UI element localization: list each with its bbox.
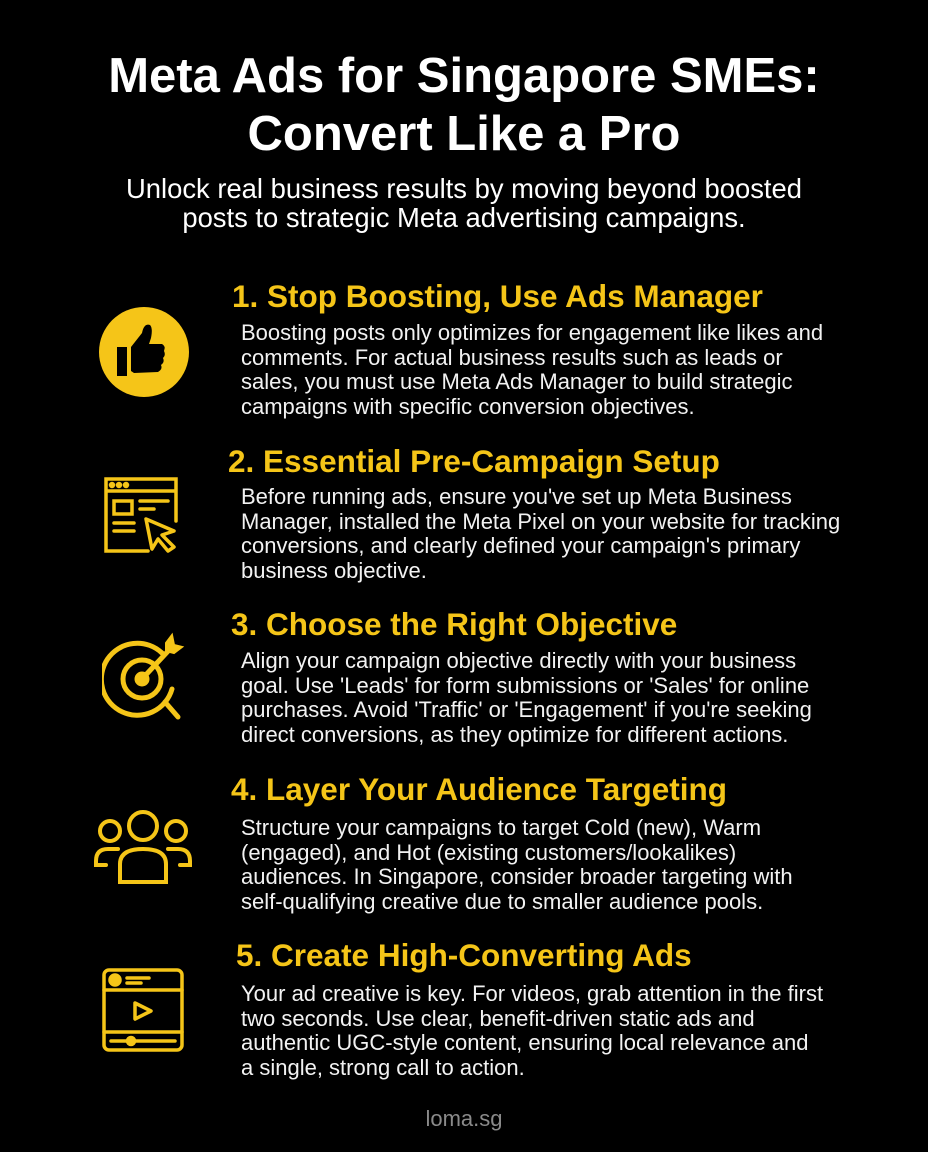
body 4: (engaged), and Hot (existing customers/lookalikes) (241, 840, 736, 864)
heading 1: 1. Stop Boosting, Use Ads Manager (232, 278, 763, 314)
body 1: sales, you must use Meta Ads Manager to build strategic (241, 369, 793, 394)
body 4: self-qualifying creative due to smaller audience pools. (241, 888, 763, 914)
body 2: Before running ads, ensure you've set up Meta Business (241, 484, 792, 509)
title: Convert Like a Pro (248, 107, 680, 161)
body 3: goal. Use 'Leads' for form submissions or 'Sales' for online (241, 672, 809, 698)
title: Meta Ads for Singapore SMEs: (108, 49, 820, 103)
body 4: Structure your campaigns to target Cold (new), Warm (241, 815, 761, 840)
body 2: business objective. (241, 558, 427, 582)
body 3: Align your campaign objective directly with your business (241, 648, 796, 673)
icon: thumbs up (99, 307, 189, 397)
subtitle (126, 173, 802, 233)
heading 3: 3. Choose the Right Objective (231, 606, 677, 642)
body 1 (241, 320, 823, 418)
section 5 (102, 937, 823, 1080)
body 2: conversions, and clearly defined your campaign's primary (241, 533, 800, 558)
icon: target search (102, 632, 184, 720)
heading 2: 2. Essential Pre-Campaign Setup (228, 443, 720, 479)
body 5 (241, 981, 823, 1080)
icon: video ad (102, 968, 184, 1052)
body 5: two seconds. Use clear, benefit-driven static ads and (241, 1006, 755, 1030)
icon: people (94, 810, 192, 884)
body 1: comments. For actual business results such as leads or (241, 344, 783, 370)
body 4: audiences. In Singapore, consider broader targeting with (241, 864, 793, 889)
section 4 (94, 771, 793, 914)
title (108, 49, 820, 161)
section 2 (104, 443, 840, 582)
body 1: campaigns with specific conversion objectives. (241, 394, 695, 418)
footer: loma.sg (425, 1106, 503, 1131)
section 3 (102, 606, 812, 746)
heading 4: 4. Layer Your Audience Targeting (231, 771, 727, 807)
body 3 (241, 648, 812, 746)
subtitle: Unlock real business results by moving beyond boosted (126, 173, 802, 204)
body 5: Your ad creative is key. For videos, grab attention in the first (241, 981, 823, 1006)
body 5: a single, strong call to action. (241, 1054, 525, 1080)
body 4 (241, 815, 793, 914)
body 5: authentic UGC-style content, ensuring local relevance and (241, 1030, 808, 1055)
subtitle: posts to strategic Meta advertising campaigns. (182, 202, 746, 233)
heading 5: 5. Create High-Converting Ads (236, 937, 692, 973)
section 1 (99, 278, 823, 418)
body 3: purchases. Avoid 'Traffic' or 'Engagement' if you're seeking (241, 697, 812, 722)
body 1: Boosting posts only optimizes for engagement like likes and (241, 320, 823, 345)
body 2 (241, 484, 840, 582)
body 2: Manager, installed the Meta Pixel on your website for tracking (241, 508, 840, 534)
body 3: direct conversions, as they optimize for different actions. (241, 722, 788, 746)
icon: browser click (104, 477, 178, 553)
